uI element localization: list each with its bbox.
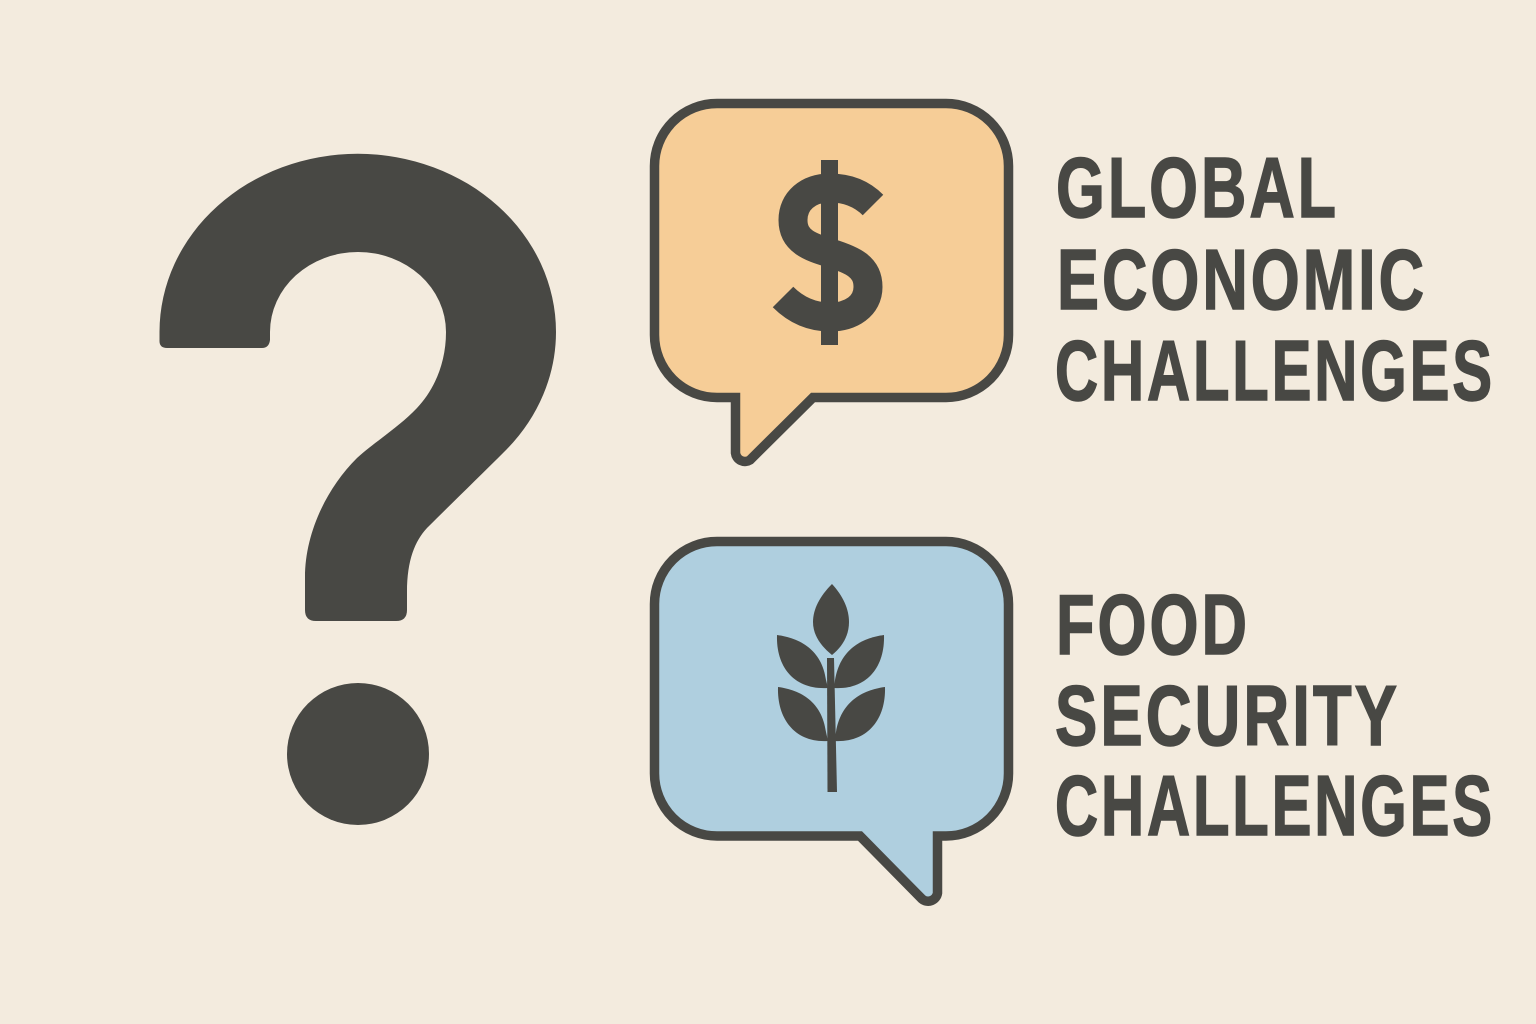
- heading: food security challenges: FOOD: [1056, 578, 1250, 673]
- icon: plant sprig: [777, 584, 885, 792]
- bubble outline: orange: [654, 104, 1009, 461]
- panel: economic speech bubble: [654, 104, 1009, 461]
- panel: food speech bubble: [654, 542, 1009, 901]
- icon: dollar sign: [783, 160, 873, 345]
- heading: food security challenges: [1055, 578, 1495, 854]
- heading: global economic challenges: GLOBAL: [1056, 141, 1339, 236]
- bubble outline: blue: [654, 542, 1009, 901]
- heading: food security challenges: SECURITY: [1055, 669, 1400, 764]
- heading: global economic challenges: [1055, 141, 1495, 419]
- icon: large question mark: [159, 154, 556, 825]
